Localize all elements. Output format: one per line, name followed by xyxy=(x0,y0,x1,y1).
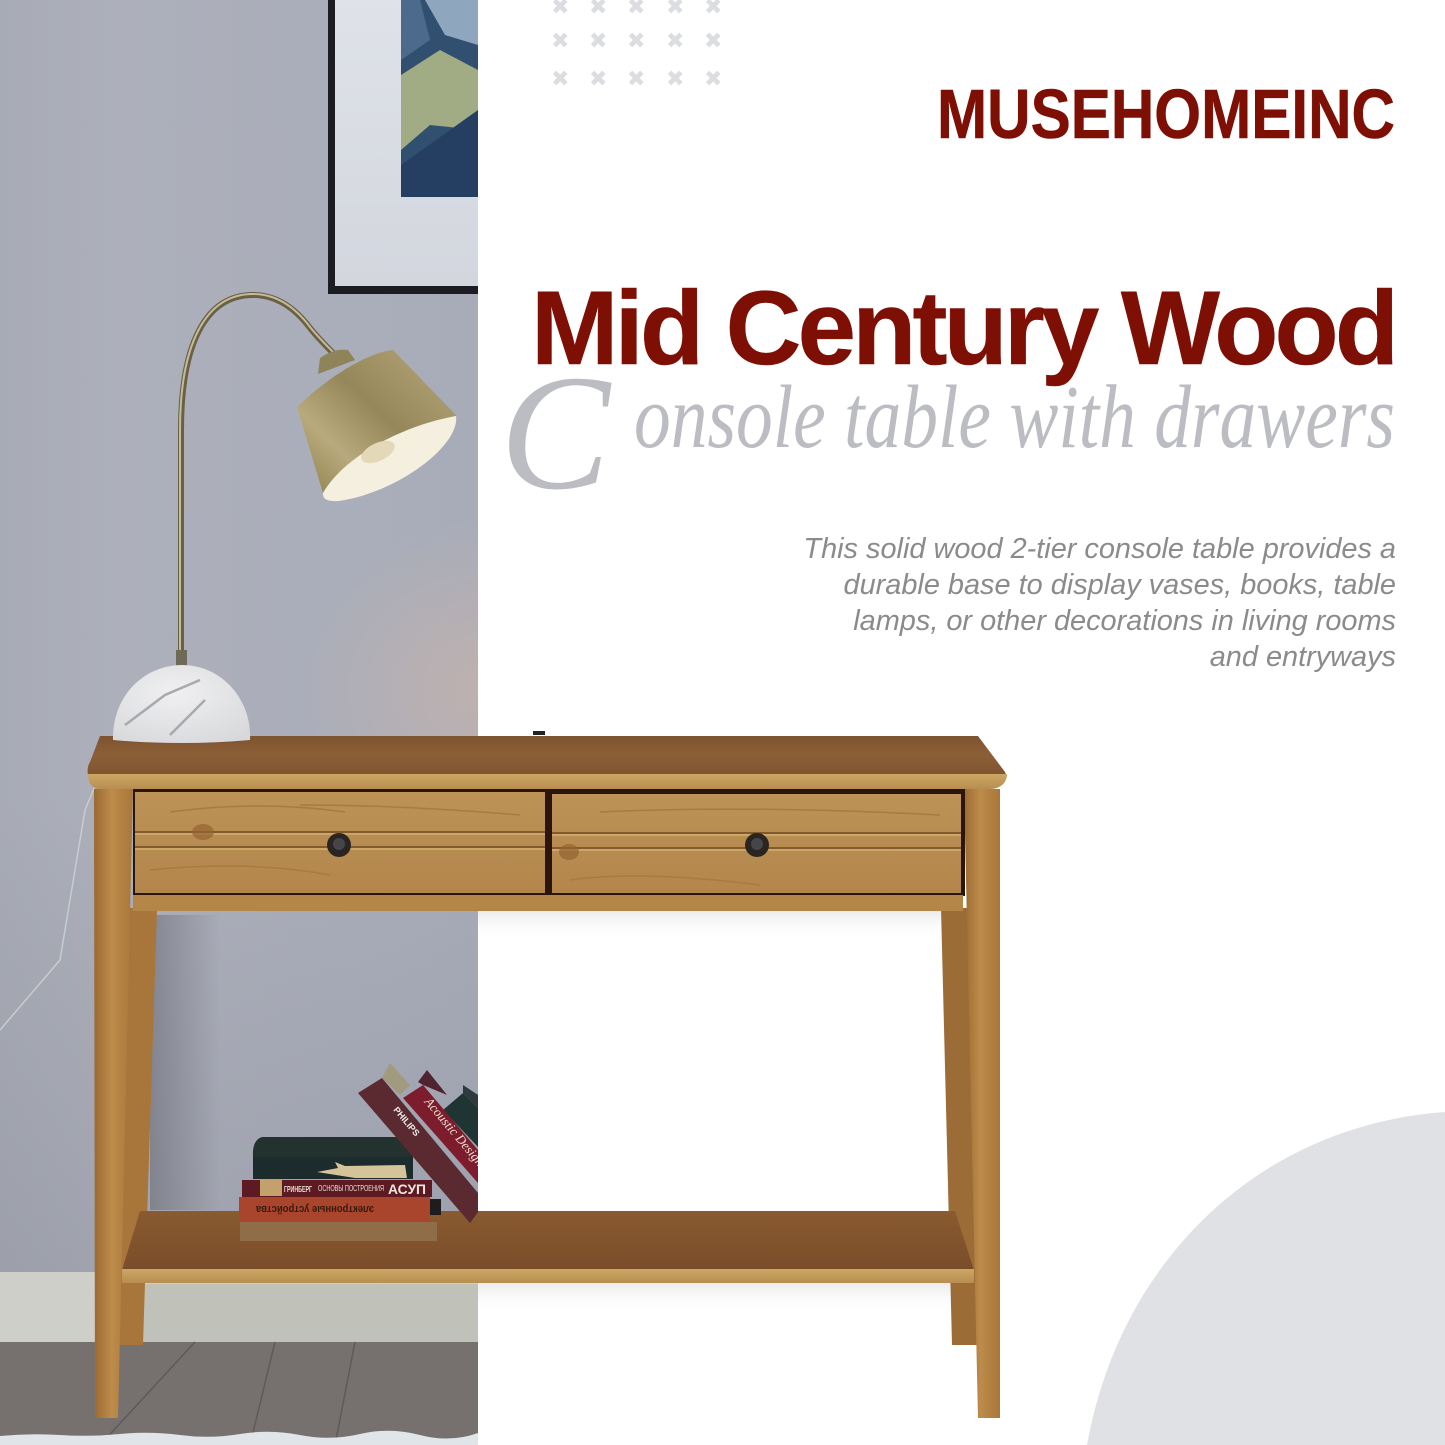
drawer knobs xyxy=(327,833,351,857)
description: lamps, or other decorations in living rooms xyxy=(853,605,1396,637)
decoration: grid of crosses: ✖ xyxy=(589,66,607,91)
decoration: grid of crosses: ✖ xyxy=(589,28,607,53)
decoration: grid of crosses: ✖ xyxy=(627,66,645,91)
back legs xyxy=(110,908,157,1345)
upper frame xyxy=(133,789,965,896)
left drawer xyxy=(135,792,545,893)
stack of books: ГРИНБЕРГ xyxy=(284,1185,312,1194)
decoration: grid of crosses xyxy=(551,0,722,91)
decoration: grid of crosses: ✖ xyxy=(704,28,722,53)
decoration: grid of crosses: ✖ xyxy=(627,28,645,53)
lower shelf xyxy=(122,1211,974,1283)
background photo: wall xyxy=(0,0,478,1445)
framed picture xyxy=(328,0,478,294)
subtitle: C xyxy=(500,341,612,524)
decoration: grid of crosses: ✖ xyxy=(704,66,722,91)
stack of books: электронные устройства xyxy=(255,1203,374,1215)
stack of books: ОСНОВЫ ПОСТРОЕНИЯ xyxy=(318,1184,384,1193)
decoration: grid of crosses: ✖ xyxy=(666,66,684,91)
stack of books: PHILIPS xyxy=(391,1105,422,1138)
decoration: grid of crosses: ✖ xyxy=(551,66,569,91)
description: and entryways xyxy=(1210,641,1396,673)
console table xyxy=(88,731,1007,1418)
description: durable base to display vases, books, table xyxy=(844,569,1396,601)
decoration: grid of crosses: ✖ xyxy=(551,28,569,53)
decoration: grid of crosses: ✖ xyxy=(666,28,684,53)
front legs xyxy=(94,789,133,1418)
table shadows on white xyxy=(478,911,953,1313)
description: This solid wood 2-tier console table provides a xyxy=(803,533,1396,565)
table top xyxy=(88,731,1007,789)
right drawer xyxy=(552,794,961,893)
decorative corner circle xyxy=(1087,1112,1445,1445)
title: Mid Century Wood xyxy=(531,270,1399,387)
table lamp xyxy=(113,294,456,743)
stack of books: Acoustic Design and xyxy=(421,1094,503,1187)
stack of books xyxy=(239,1063,503,1241)
stack of books: АСУП xyxy=(388,1181,426,1197)
description xyxy=(803,533,1396,673)
